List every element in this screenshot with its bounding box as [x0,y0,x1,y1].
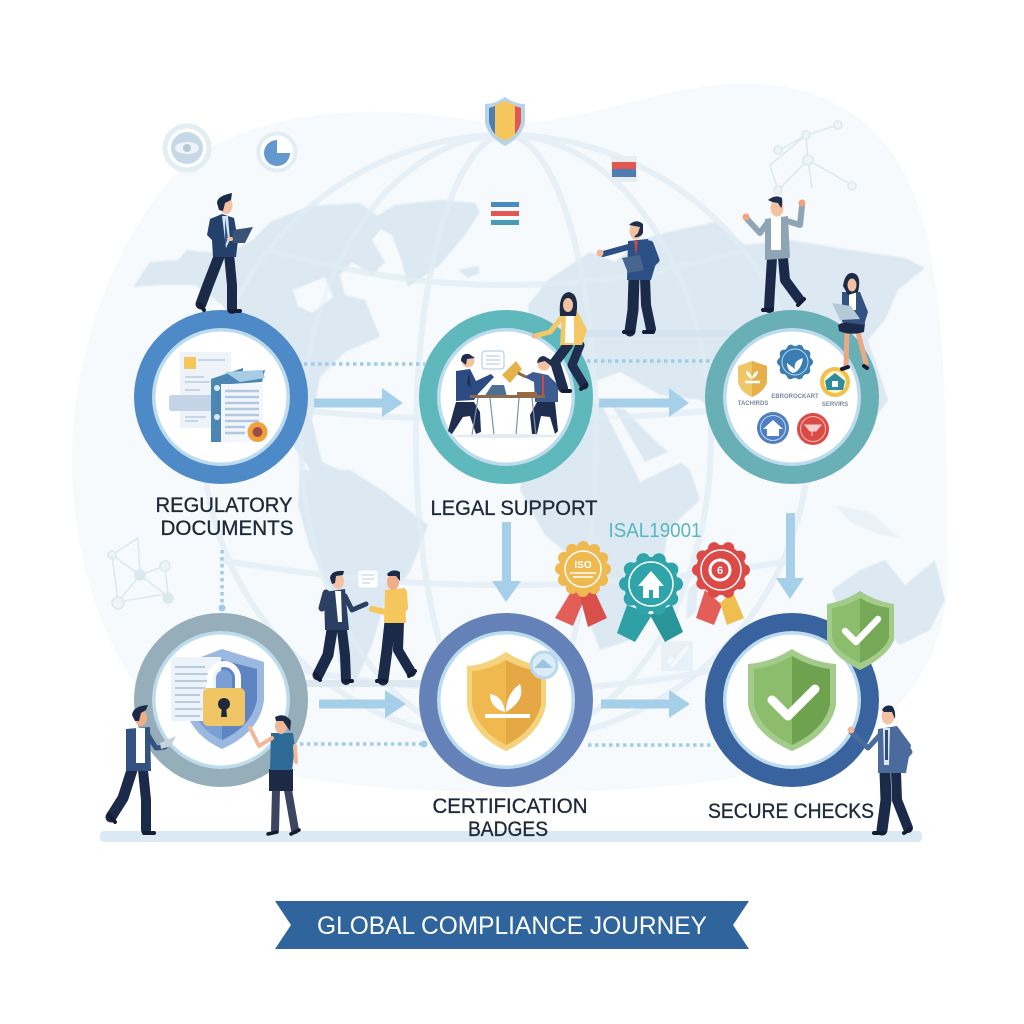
icon: red ribbon badge [696,545,746,625]
flag stripes right [611,156,637,182]
arrow: step 3 down to 6 [776,513,804,599]
icon: gold ribbon badge [555,545,607,627]
panel: legal support circle [419,310,593,484]
network icon top right [770,121,856,194]
label: badges: BADGES [468,818,548,841]
title banner: GLOBAL COMPLIANCE JOURNEY [317,912,707,940]
North America [133,203,387,480]
person: man pointing [596,221,657,332]
icon: blue house badge [757,412,789,444]
icon: gold ribbon badge: ISO [574,560,592,571]
speech bubble [358,570,378,588]
title banner [275,901,749,949]
globe grid faint over the land [203,135,809,741]
people: two men talking [315,570,415,681]
text: badge captions: EBROROCKART [771,394,819,400]
arrow: step 4 to 5 [319,690,406,718]
icon: small green shield [827,591,894,670]
arrow: step 2 down to 5 [492,522,521,602]
text: badge captions: SERVIRS [822,402,848,408]
lakes and ocean cuts [293,277,690,482]
icon: documents [169,352,268,442]
label: documents: DOCUMENTS [160,517,294,540]
icon: teal ribbon badge [617,557,683,642]
icon: large green shield [748,649,836,751]
Madagascar [686,580,698,620]
icon: gold house badge [820,367,850,397]
Africa [520,400,700,650]
panel: security lock circle [134,613,308,787]
Europe and Asia [528,222,925,470]
label: secure checks: SECURE CHECKS [708,800,874,823]
background blob [72,84,948,792]
arrow: step 5 to 6 [601,690,690,718]
arrow: step 2 to 3 [599,388,689,417]
text: ISO code: ISAL19001 [608,520,702,542]
person: woman in yellow on step 2 [532,292,587,391]
icon: meeting table scene [448,351,560,438]
top left round icon [165,126,209,170]
icon: shield with padlock [171,649,264,749]
panel: secure checks circle [705,591,894,787]
icon: blue leaf badge [779,346,811,378]
upper floor strip [585,330,735,337]
person: seated woman with tablet [832,273,868,369]
network icon bottom left [108,538,173,609]
icon: magnifier [531,652,557,678]
Australia [832,560,945,645]
Iceland [458,266,480,278]
label: regulatory documents: REGULATORY [156,494,292,517]
globe grid outside the land [203,135,809,741]
pale checkbox icon [661,641,693,671]
arrow: step 1 to 2 [314,388,403,417]
person: man with tablet bottom left [109,705,176,833]
Indonesia [835,505,900,538]
panel: regulatory documents circle [134,310,308,484]
top pie icon [258,134,296,170]
icon: gold shield [467,652,546,751]
text: badge captions [738,394,848,408]
icon: red ribbon badge: 6 [717,565,723,577]
person: man in yellow [372,570,415,681]
panel: certification badges circle [419,613,593,787]
top shield icon [485,97,525,146]
South America [298,470,428,690]
baseline [100,831,922,842]
person: man in suit [315,571,366,681]
person: man beside secure checks [848,706,911,833]
icon: red badge [797,413,829,445]
world map [133,200,945,690]
icon: yellow shield [738,361,767,397]
text: badge captions: TACHIRDS [738,401,768,407]
person: woman in blue top [250,715,299,834]
lower floor strip [300,680,425,687]
Greenland [367,200,480,287]
person: man with raised hands [742,196,806,310]
person: man with tablet on step 1 [200,193,253,311]
label: legal support: LEGAL SUPPORT [430,497,598,520]
flag stripes centre [491,202,519,225]
label: certification: CERTIFICATION [432,795,588,818]
panel: certifications circle [705,310,879,484]
dotted connectors [222,361,712,745]
